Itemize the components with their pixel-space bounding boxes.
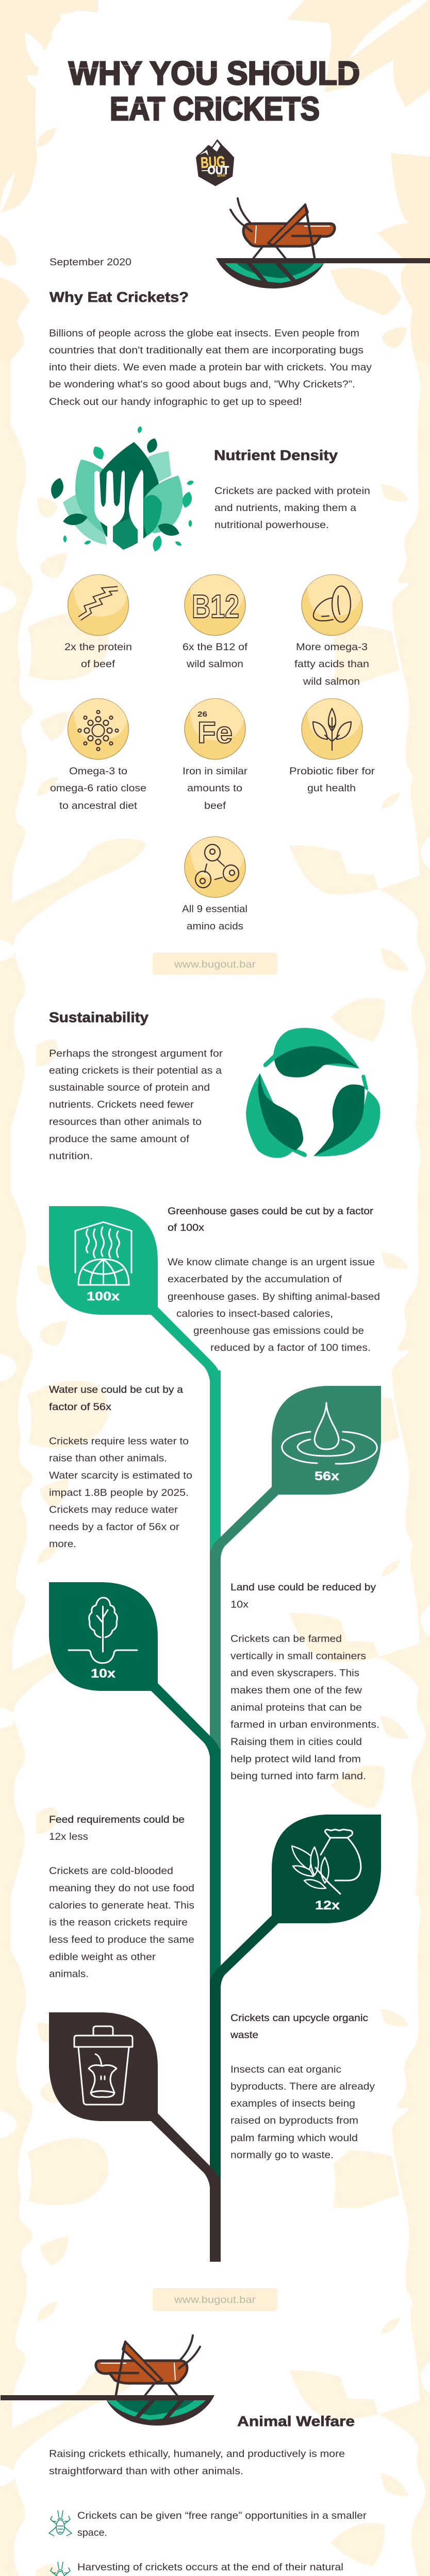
text: greenhouse gases: calories to insect-based calories, bbox=[176, 1308, 333, 1319]
text: animal welfare intro: straightforward than with other animals. bbox=[49, 2466, 243, 2477]
intro text bbox=[49, 328, 372, 408]
text: nutrient density: Crickets are packed with protein bbox=[214, 485, 370, 497]
icon: greenhouse globe bbox=[75, 1222, 131, 1285]
leaf panel: greenhouse gases 100x bbox=[49, 1206, 221, 1386]
icon: fork and knife with leaves bbox=[48, 426, 194, 553]
link button 2: www.bugout.bar bbox=[174, 2294, 256, 2306]
icon circle: amino acids bbox=[185, 837, 245, 897]
label: protein bbox=[64, 641, 132, 670]
text: sustainability: produce the same amount of bbox=[49, 1133, 190, 1145]
trunk: stem of sustainability tree bbox=[210, 1370, 221, 2262]
text: sustainability bbox=[49, 1048, 223, 1162]
text: land use bbox=[230, 1582, 379, 1782]
label: omega-3: More omega-3 bbox=[296, 641, 368, 653]
logo: Bug Out Bar small: BUG bbox=[200, 154, 226, 172]
label: iron: amounts to bbox=[187, 783, 242, 794]
icon circle: omega-3 capsules bbox=[302, 575, 362, 636]
text: sustainability: eating crickets is their potential as a bbox=[49, 1065, 222, 1076]
text: feed requirements: less feed to produce the same bbox=[49, 1934, 194, 1945]
text: sustainability: resources than other animals to bbox=[49, 1116, 202, 1127]
text: greenhouse gases: reduced by a factor of 100 times. bbox=[210, 1342, 371, 1353]
text: organic waste: normally go to waste. bbox=[230, 2149, 334, 2161]
text: water use: Crickets require less water to bbox=[49, 1435, 189, 1447]
text: feed requirements: 12x less bbox=[49, 1831, 88, 1842]
bullet 2: cricket icon and text: Harvesting of crickets occurs at the end of their natural bbox=[77, 2562, 343, 2573]
icon circle: probiotic plant bbox=[302, 699, 362, 759]
intro text: Billions of people across the globe eat insects. Even people from bbox=[49, 328, 359, 339]
icon: water drop bbox=[282, 1403, 377, 1464]
text: water use: Crickets may reduce water bbox=[49, 1504, 178, 1516]
heading: Sustainability: Sustainability bbox=[49, 1009, 149, 1025]
label: amino acids bbox=[182, 904, 247, 932]
link button 2 bbox=[153, 2288, 277, 2311]
label: protein: 2x the protein bbox=[64, 641, 132, 653]
icon circle: protein bbox=[68, 575, 129, 636]
text: organic waste bbox=[230, 2012, 375, 2161]
text: water use: Water use could be cut by a bbox=[49, 1384, 183, 1395]
text: water use: raise than other animals. bbox=[49, 1453, 167, 1464]
intro text: be wondering what's so good about bugs and, "Why Crickets?". bbox=[49, 379, 355, 390]
icon: cricket bbox=[49, 2511, 72, 2536]
text: organic waste: Crickets can upcycle organic bbox=[230, 2012, 368, 2024]
text: feed requirements: calories to generate heat. This bbox=[49, 1900, 194, 1911]
icon circle: iron Fe bbox=[185, 699, 245, 759]
text: greenhouse gases: exacerbated by the accumulation of bbox=[168, 1274, 342, 1285]
text: sustainability: Perhaps the strongest argument for bbox=[49, 1048, 223, 1059]
text: organic waste: byproducts. There are already bbox=[230, 2081, 375, 2092]
text: land use: makes them one of the few bbox=[230, 1685, 362, 1696]
title: EAT CRICKETS bbox=[110, 90, 320, 127]
link button 1 bbox=[153, 953, 277, 975]
label: omega ratio: Omega-3 to bbox=[69, 766, 127, 777]
leaf panel: water use 56x: 56x bbox=[315, 1469, 340, 1483]
text: sustainability: sustainable source of protein and bbox=[49, 1082, 210, 1093]
text: sustainability: nutrients. Crickets need fewer bbox=[49, 1099, 194, 1110]
text: organic waste: waste bbox=[230, 2029, 258, 2041]
bullet 1: cricket icon and text: Crickets can be given “free range” opportunities in a smaller bbox=[77, 2510, 367, 2521]
text: water use: impact 1.8B people by 2025. bbox=[49, 1487, 189, 1498]
text: land use: and even skyscrapers. This bbox=[230, 1668, 359, 1679]
text: nutrient density bbox=[214, 485, 370, 531]
text: feed requirements: Crickets are cold-blooded bbox=[49, 1865, 173, 1876]
intro text: countries that don't traditionally eat them are incorporating bugs bbox=[49, 345, 363, 356]
text: water use: factor of 56x bbox=[49, 1401, 111, 1413]
label: amino acids: All 9 essential bbox=[182, 904, 247, 915]
cricket on spoon illustration (mirrored) bbox=[1, 2335, 214, 2426]
text: greenhouse gases: greenhouse gases. By shifting animal-based bbox=[168, 1291, 380, 1302]
label: iron bbox=[183, 766, 248, 811]
text: land use: 10x bbox=[230, 1599, 249, 1611]
leaf panel: organic waste bbox=[49, 2012, 221, 2192]
label: omega-3 bbox=[294, 641, 369, 687]
text: feed requirements: Feed requirements could be bbox=[49, 1814, 185, 1825]
text: greenhouse gases bbox=[168, 1206, 380, 1353]
text: sustainability: nutrition. bbox=[49, 1150, 93, 1162]
label: probiotic bbox=[289, 766, 375, 794]
label: omega-3: fatty acids than bbox=[294, 658, 369, 670]
text: organic waste: Insects can eat organic bbox=[230, 2064, 341, 2075]
text: water use: Water scarcity is estimated to bbox=[49, 1470, 192, 1481]
date: September 2020 bbox=[49, 257, 131, 268]
icon circle: iron Fe: 26 bbox=[197, 710, 207, 719]
leaf panel: greenhouse gases 100x: 100x bbox=[87, 1290, 120, 1303]
label: B12: wild salmon bbox=[186, 658, 243, 670]
label: omega ratio: omega-6 ratio close bbox=[50, 783, 146, 794]
icon circle: B12: B12 bbox=[192, 588, 239, 625]
leaf panel: land use 10x: 10x bbox=[91, 1667, 116, 1681]
text: land use: animal proteins that can be bbox=[230, 1702, 362, 1714]
leaf panel: feed 12x bbox=[210, 1815, 381, 1994]
title bbox=[69, 55, 360, 127]
text: land use: help protect wild land from bbox=[230, 1754, 361, 1765]
text: land use: being turned into farm land. bbox=[230, 1771, 366, 1782]
text: land use: vertically in small containers bbox=[230, 1651, 366, 1662]
icon circle: iron Fe: Fe bbox=[197, 716, 233, 750]
logo: Bug Out Bar small: BAR bbox=[217, 173, 226, 178]
label: protein: of beef bbox=[81, 658, 115, 670]
label: omega-3: wild salmon bbox=[303, 676, 360, 687]
bullet 2: cricket icon and text bbox=[49, 2562, 343, 2576]
leaf panel: water use 56x bbox=[210, 1386, 381, 1566]
label: iron: beef bbox=[204, 800, 226, 811]
text: organic waste: examples of insects being bbox=[230, 2098, 355, 2109]
icon circle: omega ratio molecule bbox=[68, 699, 129, 759]
text: nutrient density: nutritional powerhouse. bbox=[214, 519, 329, 531]
bullet 1: cricket icon and text bbox=[49, 2510, 367, 2538]
heading: Nutrient Density: Nutrient Density bbox=[214, 447, 338, 463]
icon: tree and soil bbox=[69, 1598, 137, 1663]
text: organic waste: raised on byproducts from bbox=[230, 2115, 358, 2126]
icon: feed sack and leaves bbox=[292, 1829, 361, 1894]
intro text: Check out our handy infographic to get up to speed! bbox=[49, 396, 302, 408]
leaf panel: feed 12x: 12x bbox=[315, 1899, 340, 1912]
text: land use: Land use could be reduced by bbox=[230, 1582, 376, 1593]
text: greenhouse gases: We know climate change is an urgent issue bbox=[168, 1257, 375, 1268]
label: amino acids: amino acids bbox=[187, 921, 243, 932]
logo: Bug Out Bar small bbox=[196, 139, 234, 186]
icon circle: B12 bbox=[185, 575, 245, 636]
text: land use: Crickets can be farmed bbox=[230, 1633, 342, 1645]
label: probiotic: Probiotic fiber for bbox=[289, 766, 375, 777]
text: land use: farmed in urban environments. bbox=[230, 1719, 379, 1731]
text: feed requirements bbox=[49, 1814, 194, 1979]
text: greenhouse gases: of 100x bbox=[168, 1222, 204, 1233]
cricket on spoon illustration bbox=[216, 198, 430, 289]
icon: compost bin with apple core bbox=[74, 2026, 133, 2105]
text: nutrient density: and nutrients, making them a bbox=[214, 502, 356, 514]
text: animal welfare intro: Raising crickets ethically, humanely, and productively is more bbox=[49, 2448, 345, 2460]
bullet 1: cricket icon and text: space. bbox=[77, 2527, 107, 2538]
title: WHY YOU SHOULD bbox=[69, 55, 360, 92]
text: water use: more. bbox=[49, 1538, 76, 1550]
text: feed requirements: edible weight as other bbox=[49, 1952, 156, 1963]
label: probiotic: gut health bbox=[307, 783, 356, 794]
text: animal welfare intro bbox=[49, 2448, 345, 2477]
intro text: into their diets. We even made a protein bar with crickets. You may bbox=[49, 362, 372, 373]
leaf panel: land use 10x bbox=[49, 1582, 221, 1762]
logo: Bug Out Bar small: OUT bbox=[207, 164, 229, 177]
label: iron: Iron in similar bbox=[183, 766, 248, 777]
link button 1: www.bugout.bar bbox=[174, 959, 256, 970]
text: water use bbox=[49, 1384, 192, 1550]
text: feed requirements: is the reason crickets require bbox=[49, 1917, 188, 1928]
text: land use: Raising them in cities could bbox=[230, 1736, 362, 1748]
text: greenhouse gases: greenhouse gas emissions could be bbox=[193, 1325, 364, 1336]
text: feed requirements: meaning they do not use food bbox=[49, 1883, 194, 1894]
text: water use: needs by a factor of 56x or bbox=[49, 1521, 180, 1533]
icon: recycling leaves bbox=[246, 1028, 380, 1158]
label: B12: 6x the B12 of bbox=[183, 641, 248, 653]
label: omega ratio: to ancestral diet bbox=[59, 800, 138, 811]
text: organic waste: palm farming which would bbox=[230, 2132, 358, 2144]
heading: Animal Welfare: Animal Welfare bbox=[237, 2413, 355, 2429]
icon: cricket bbox=[49, 2562, 72, 2576]
label: B12 bbox=[183, 641, 248, 670]
text: feed requirements: animals. bbox=[49, 1968, 89, 1979]
heading: Why Eat Crickets?: Why Eat Crickets? bbox=[49, 289, 189, 305]
text: greenhouse gases: Greenhouse gases could be cut by a factor bbox=[168, 1206, 374, 1217]
label: omega ratio bbox=[50, 766, 146, 811]
